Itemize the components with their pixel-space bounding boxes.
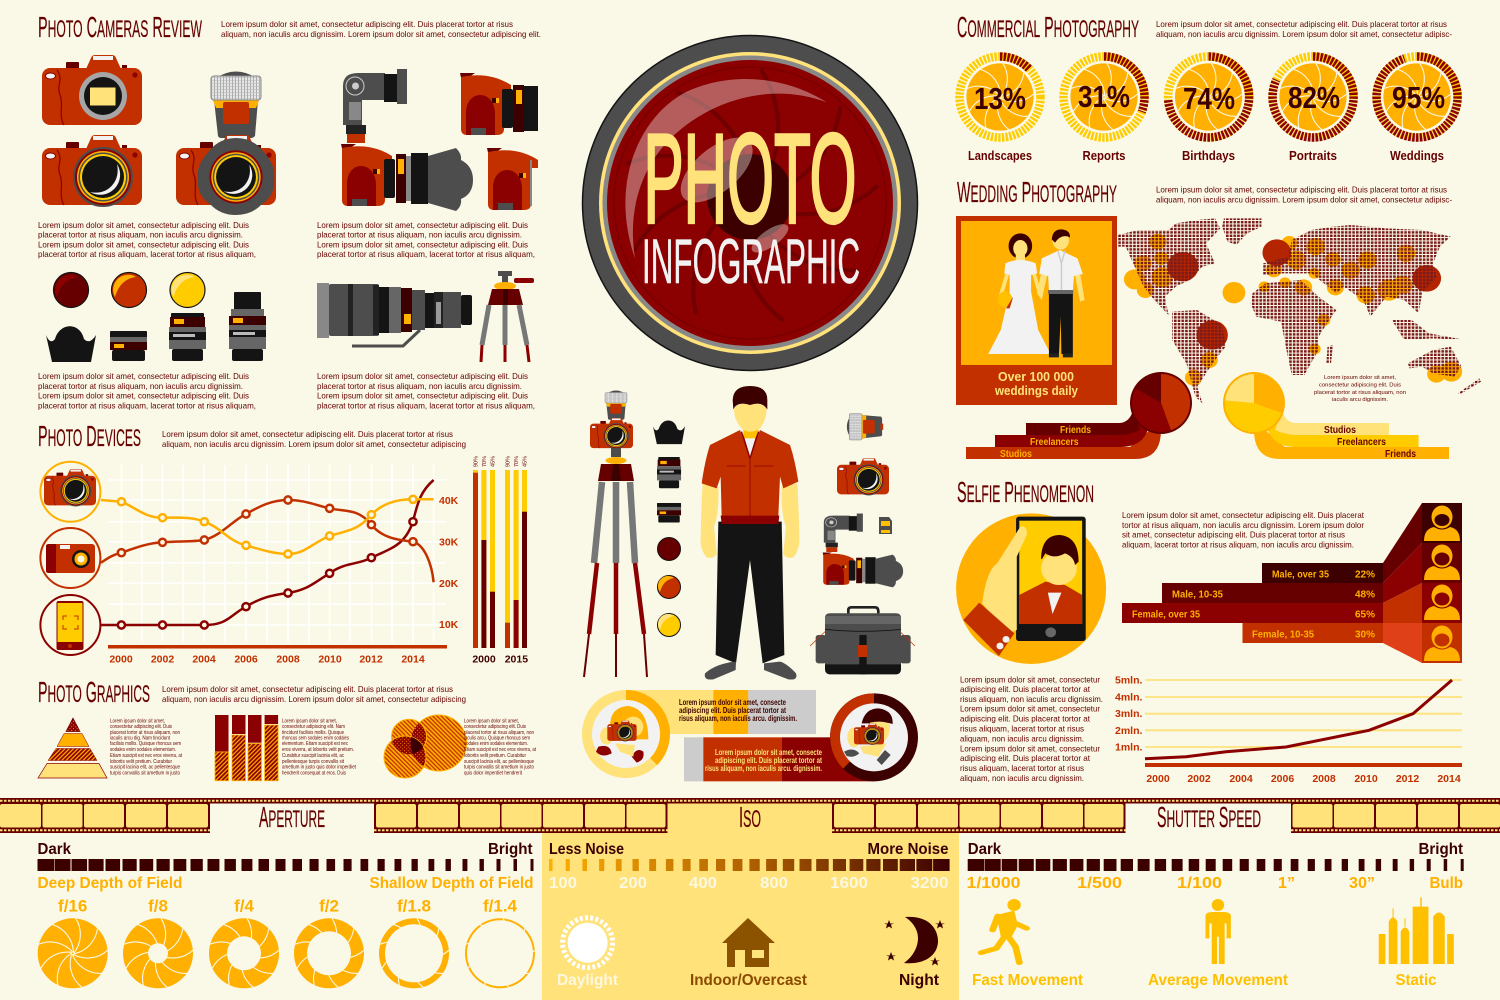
figure: bride and groom	[988, 229, 1085, 357]
text: camera bodies: placerat tortor at risus aliquam, lacerat tortor at risus aliquam,	[38, 249, 256, 259]
text: stacked bars	[282, 718, 356, 776]
text: telephoto and tripod: placerat tortor at risus aliquam, lacerat tortor at risus aliquam,	[317, 400, 535, 410]
panel: shutter scale: 1/500	[1077, 875, 1122, 892]
aperture stops	[38, 896, 536, 989]
callout: lorem yellow with photographer	[582, 690, 816, 778]
icon: static city	[1379, 897, 1454, 989]
text: stacked bars: eros viverra, at lobortis velit pretium.	[282, 747, 354, 753]
heading: shutter speed: SHUTTER SPEED	[1157, 802, 1261, 834]
text: map note	[1314, 375, 1406, 403]
intro text: graphics: Lorem ipsum dolor sit amet, consectetur adipiscing elit. Duis placerat tortor at risus	[162, 684, 453, 694]
world map	[1117, 218, 1481, 403]
line chart: selfies per year: 2014	[1437, 773, 1461, 785]
chart: selfie demographic funnel	[1122, 503, 1462, 663]
text: stacked bars: rhoncus sem sodales enim sodales	[282, 736, 349, 742]
gauge: portraits 82%: Portraits	[1289, 149, 1337, 163]
intro text: cameras: Lorem ipsum dolor sit amet, consectetur adipiscing elit. Duis placerat tortor at risus	[221, 19, 513, 29]
text: map note: consectetur adipiscing elit. Duis	[1319, 382, 1401, 388]
icon: fast movement runner: Fast Movement	[972, 972, 1084, 989]
intro text: devices: aliquam, non iaculis arcu dignissim. Lorem ipsum dolor sit amet, consectetur adipiscing	[162, 439, 466, 449]
gauge: portraits 82%	[1272, 56, 1354, 163]
text: pyramid: consectetur adipiscing elit. Duis	[110, 724, 172, 730]
text: selfie intro: aliquam, lacerat tortor at risus aliquam, non iaculis arcu dignissim.	[1122, 540, 1354, 550]
icon: camera bag	[810, 607, 915, 674]
text: venn diagram: lobortis velit pretium. Curabitur	[464, 753, 526, 759]
heading: commercial photography: COMMERCIAL PHOTOGRAPHY	[957, 12, 1139, 44]
text: pyramid: lobortis velit pretium. Curabitur	[110, 759, 172, 765]
text: camera bodies: Lorem ipsum dolor sit amet, consectetur adipiscing elit. Duis	[38, 220, 249, 230]
bar labels: 30%	[1355, 628, 1376, 640]
text: yellow callout: risus aliquam, non iaculis arcu. dignissim.	[679, 714, 797, 723]
x axis years: 2002	[151, 654, 174, 666]
line chart: photo devices	[101, 465, 459, 666]
text: filters and lenses	[38, 371, 256, 410]
icon: indoor house: Indoor/Overcast	[690, 972, 808, 989]
panel: shutter scale: Bulb	[1430, 875, 1463, 892]
icon: average movement person: Average Movement	[1148, 972, 1289, 989]
aperture stops: f/4	[234, 896, 254, 916]
text: side cameras: Lorem ipsum dolor sit amet, consectetur adipiscing elit. Duis	[317, 239, 528, 249]
icon: static city: Static	[1396, 972, 1437, 989]
icon: camera with lens	[42, 135, 142, 207]
chart: right pie with ribbons: Freelancers	[1337, 437, 1386, 448]
gauge: birthdays 74%: 74%	[1183, 81, 1235, 116]
text: filters and lenses: Lorem ipsum dolor sit amet, consectetur adipiscing elit. Duis	[38, 390, 249, 400]
text: venn diagram	[464, 718, 536, 776]
text: stacked bars: consectetur adipiscing elit. Nam	[282, 724, 345, 730]
text: red callout	[705, 748, 822, 773]
intro text: wedding	[1156, 184, 1452, 204]
text: map note: Lorem ipsum dolor sit amet,	[1324, 375, 1396, 381]
icon: side camera body	[487, 148, 538, 210]
icon: lens hood	[46, 326, 96, 362]
bar labels: Male, 10-35	[1172, 588, 1223, 600]
gauge: reports 31%: 31%	[1078, 79, 1130, 114]
y axis values: 20K	[439, 578, 459, 590]
icon: fast movement runner	[972, 899, 1084, 989]
chart: right pie with ribbons	[1223, 372, 1449, 460]
heading: photo cameras review: PHOTO CAMERAS REVIEW	[38, 12, 202, 44]
intro text: graphics	[162, 684, 466, 704]
text: telephoto and tripod	[317, 371, 535, 410]
text: telephoto and tripod: Lorem ipsum dolor sit amet, consectetur adipiscing elit. Duis	[317, 371, 528, 381]
title badge: lens: INFOGRAPHIC	[642, 227, 860, 297]
text: venn diagram: suscipit lacinia elit, ac pellentesque	[464, 759, 534, 765]
text: filters and lenses: placerat tortor at risus aliquam, lacerat tortor at risus aliquam,	[38, 400, 256, 410]
gauge: landscapes 13%	[960, 56, 1040, 163]
text: red callout: adipiscing elit. Duis placerat tortor at	[715, 756, 822, 765]
text: red callout: risus aliquam, non iaculis arcu. dignissim.	[705, 764, 822, 773]
text: red callout: Lorem ipsum dolor sit amet, consecte	[715, 748, 822, 757]
text: map note: iaculis arcu dignissim.	[1332, 397, 1388, 403]
icon: DSLR badge	[40, 462, 100, 522]
panel: aperture scale	[38, 841, 534, 892]
text: selfie body: Lorem ipsum dolor sit amet, consectetur	[960, 743, 1100, 753]
text: filters and lenses: Lorem ipsum dolor sit amet, consectetur adipiscing elit. Duis	[38, 371, 249, 381]
text: selfie body: risus aliquam, lacerat tortor at risus	[960, 763, 1084, 773]
text: selfie intro	[1122, 510, 1365, 550]
icon: indoor house	[690, 918, 808, 989]
icon: daylight sun: Daylight	[557, 972, 619, 989]
text: venn diagram: consectetur adipiscing elit. Duis	[464, 724, 526, 730]
intro text: graphics: aliquam, non iaculis arcu dignissim. Lorem ipsum dolor sit amet, consectetur adipiscing	[162, 694, 466, 704]
text: venn diagram: Lorem ipsum dolor sit amet,	[464, 718, 519, 724]
text: camera bodies	[38, 220, 256, 259]
panel: shutter scale: Bright	[1418, 841, 1464, 858]
text: venn diagram: sodales enim sodales elementum.	[464, 741, 528, 747]
line chart: selfies per year: 1mln.	[1115, 742, 1143, 754]
x axis years: 2012	[359, 654, 383, 666]
text: selfie intro: Lorem ipsum dolor sit amet, consectetur adipiscing elit. Duis placerat	[1122, 510, 1365, 520]
text: pyramid: sodales enim sodales elementum.	[110, 747, 176, 753]
panel: aperture scale: Bright	[488, 841, 533, 858]
panel: iso scale: 400	[689, 875, 717, 892]
text: camera bodies: Lorem ipsum dolor sit amet, consectetur adipiscing elit. Duis	[38, 239, 249, 249]
text: selfie body: aliquam, non iaculis arcu dignissim.	[960, 733, 1084, 743]
bar labels: 22%	[1355, 568, 1376, 580]
chart: pyramid	[38, 718, 107, 778]
y axis values	[439, 495, 459, 631]
y axis values: 40K	[439, 495, 459, 507]
text: pyramid	[110, 718, 182, 776]
line chart: selfies per year: 2010	[1354, 773, 1378, 785]
icon: side camera with flash and telephoto hood	[341, 69, 473, 211]
text: selfie body: risus aliquam, lacerat tortor at risus	[960, 724, 1084, 734]
bar chart: 2000 vs 2015: 70%	[482, 456, 488, 467]
series: smartphones	[101, 480, 434, 629]
icon: daylight sun	[557, 918, 619, 989]
line chart: selfies per year: 2000	[1146, 773, 1170, 785]
gauge: reports 31%	[1064, 56, 1145, 163]
text: pyramid: iaculis arcu dig. Nam tincidunt	[110, 736, 170, 742]
panel: iso scale: More Noise	[868, 841, 949, 858]
text: telephoto and tripod: placerat tortor at risus aliquam, non iaculis arcu dignissim.	[317, 381, 522, 391]
bar chart: 2000 vs 2015: 90%	[506, 456, 512, 467]
text: venn diagram: placerat tortor at risus aliquam, non	[464, 730, 534, 736]
line chart: selfies per year: 2002	[1187, 773, 1211, 785]
aperture stops: f/1.4	[483, 896, 518, 916]
gauge: weddings 95%	[1376, 56, 1458, 163]
series: DSLR cameras	[101, 496, 434, 558]
icon: camera body with sensor	[42, 55, 142, 125]
icon: small camera	[837, 458, 889, 495]
text: selfie body: adipiscing elit. Duis placerat tortor at	[960, 753, 1091, 763]
title badge: lens	[582, 36, 918, 370]
chart: left pie with ribbons: Freelancers	[1030, 437, 1079, 448]
busts	[1424, 506, 1460, 661]
text: venn diagram: iaculis arcu. Quisque rhoncus sem	[464, 736, 530, 742]
icon: memory card	[879, 517, 892, 534]
text: pyramid: placerat tortor at risus aliquam, non	[110, 730, 180, 736]
text: camera bodies: placerat tortor at risus aliquam, non iaculis arcu dignissim.	[38, 230, 243, 240]
text: venn diagram: quis dolor imperdiet hendrerit	[464, 770, 522, 776]
bar chart: 2000 vs 2015: 2015	[505, 654, 528, 666]
icons: lenses	[110, 292, 266, 361]
series: compact cameras	[101, 496, 434, 582]
bar labels: 48%	[1355, 588, 1376, 600]
icon: camera on tall tripod	[584, 391, 647, 677]
text: selfie body: Lorem ipsum dolor sit amet, consectetur	[960, 674, 1100, 684]
chart: left pie with ribbons: Friends	[1060, 425, 1091, 436]
heading: photo graphics: PHOTO GRAPHICS	[38, 677, 150, 709]
aperture stops: f/8	[148, 896, 168, 916]
panel: iso scale: Less Noise	[549, 841, 624, 858]
panel: iso scale: 3200	[910, 875, 949, 892]
panel: aperture scale: Shallow Depth of Field	[370, 875, 534, 892]
chart: left pie with ribbons: Studios	[1000, 449, 1032, 460]
gauge: weddings 95%: 95%	[1392, 80, 1445, 115]
x axis years: 2014	[401, 654, 425, 666]
y axis values: 30K	[439, 537, 459, 549]
text: stacked bars: hendrerit consequat at eros. Duis	[282, 770, 346, 776]
icons: hood, lenses, filters column	[653, 421, 685, 636]
bar chart: 2000 vs 2015	[472, 456, 528, 666]
y axis values: 10K	[439, 619, 459, 631]
panel: shutter scale: 1/100	[1177, 875, 1222, 892]
text: venn diagram: turpis convallis sit ametlum in justo	[464, 764, 534, 770]
text: stacked bars: tincidunt facilisis mollis. Quisque	[282, 730, 344, 736]
line chart: selfies per year: 2012	[1396, 773, 1419, 785]
gauge: birthdays 74%: Birthdays	[1182, 149, 1235, 163]
panel: iso scale: 800	[760, 875, 788, 892]
chart: right pie with ribbons: Friends	[1385, 449, 1416, 460]
x axis years	[109, 654, 425, 666]
heading: wedding photography: WEDDING PHOTOGRAPHY	[957, 177, 1117, 209]
panel: shutter scale	[966, 841, 1464, 892]
text: stacked bars: Lorem ipsum dolor sit amet,	[282, 718, 337, 724]
chart: right pie with ribbons: Studios	[1324, 425, 1356, 436]
text: pyramid: turpis convallis sit ametlum in justo	[110, 770, 180, 776]
text: selfie body: Lorem ipsum dolor sit amet, consectetur	[960, 704, 1100, 714]
icon: small tripod	[481, 271, 534, 362]
panel: wedding couple poster	[956, 216, 1117, 405]
intro text: devices: Lorem ipsum dolor sit amet, consectetur adipiscing elit. Duis placerat tortor at risus	[162, 429, 453, 439]
panel: iso scale: 1600	[830, 875, 868, 892]
panel: iso background	[542, 803, 959, 1000]
text: stacked bars: pellentesque turpis convallis sit	[282, 759, 344, 765]
gauge: weddings 95%: Weddings	[1390, 149, 1444, 163]
intro text: commercial: Lorem ipsum dolor sit amet, consectetur adipiscing elit. Duis placerat tortor at risus	[1156, 19, 1447, 29]
bar chart: 2000 vs 2015: 70%	[514, 456, 520, 467]
intro text: cameras: aliquam, non iaculis arcu dignissim. Lorem ipsum dolor sit amet, consectetur adipiscing elit.	[221, 29, 541, 39]
icon: night moon: Night	[899, 972, 940, 989]
icon: flash unit	[847, 414, 883, 440]
text: selfie body: risus aliquam, non iaculis arcu dignissim.	[960, 694, 1103, 704]
bar chart: 2000 vs 2015: 45%	[522, 456, 528, 467]
bar chart: 2000 vs 2015: 90%	[474, 456, 480, 467]
figure: photographer	[701, 386, 799, 680]
panel: shutter scale: 1”	[1278, 875, 1295, 892]
poster caption: weddings daily	[994, 383, 1079, 398]
icon: average movement person	[1148, 899, 1289, 989]
text: pyramid: facilisis mollis. Quisque rhoncus sem	[110, 741, 181, 747]
text: map note: placerat tortor at risus aliquam, non	[1314, 390, 1406, 396]
bar chart: 2000 vs 2015: 2000	[472, 654, 496, 666]
chart: venn diagram	[384, 715, 467, 778]
gauge: landscapes 13%: Landscapes	[968, 149, 1032, 163]
text: yellow callout	[679, 698, 797, 723]
icon: telephoto lens	[317, 283, 472, 346]
panel: iso scale: 200	[619, 875, 647, 892]
bar labels	[1132, 568, 1376, 640]
line chart: selfies per year	[1115, 674, 1462, 785]
x axis years: 2004	[192, 654, 216, 666]
text: selfie body: adipiscing elit. Duis placerat tortor at	[960, 684, 1091, 694]
title badge: lens: PHOTO	[644, 108, 856, 250]
icon: camera with flash and hood	[176, 72, 276, 215]
text: pyramid: Etiam suscipit est nec eros viverra, at	[110, 753, 182, 759]
text: stacked bars: Curabitur suscipit lacinia elit, ac	[282, 753, 344, 759]
panel: aperture scale: Deep Depth of Field	[38, 875, 182, 892]
x axis years: 2010	[318, 654, 342, 666]
chart: left pie with ribbons	[966, 372, 1192, 460]
intro text: devices	[162, 429, 466, 449]
text: selfie body	[960, 674, 1103, 783]
icon: compact camera badge	[40, 528, 100, 588]
gauge: portraits 82%: 82%	[1288, 80, 1340, 115]
bar labels: Female, over 35	[1132, 608, 1200, 620]
text: side cameras	[317, 220, 535, 259]
intro text: commercial	[1156, 19, 1452, 39]
text: yellow callout: Lorem ipsum dolor sit amet, consecte	[679, 698, 786, 707]
x axis years: 2006	[234, 654, 258, 666]
text: selfie intro: sit amet, consectetur adipiscing elit. Duis placerat tortor at risus	[1122, 530, 1345, 540]
text: side cameras: placerat tortor at risus aliquam, lacerat tortor at risus aliquam,	[317, 249, 535, 259]
icon: flash camera combo	[823, 514, 903, 587]
icons: lens filters	[54, 272, 205, 308]
gauge: landscapes 13%: 13%	[974, 81, 1026, 116]
heading: aperture: APERTURE	[259, 802, 325, 834]
intro text: cameras	[221, 19, 541, 39]
panel: shutter scale: Dark	[968, 841, 1001, 858]
icon: hand holding phone	[956, 513, 1106, 664]
gauge: birthdays 74%	[1168, 56, 1249, 163]
line chart: selfies per year: 2006	[1271, 773, 1294, 785]
panel: iso scale: 100	[549, 875, 577, 892]
line chart: selfies per year: 2mln.	[1115, 725, 1143, 737]
line chart: selfies per year: 4mln.	[1115, 692, 1143, 704]
chart: stacked bars	[215, 715, 278, 781]
bar labels: Female, 10-35	[1252, 628, 1314, 640]
x axis years: 2000	[109, 654, 133, 666]
bar chart: 2000 vs 2015: 45%	[490, 456, 496, 467]
heading: selfie phenomenon: SELFIE PHENOMENON	[957, 477, 1094, 509]
text: selfie body: aliquam, non iaculis arcu dignissim.	[960, 773, 1084, 783]
line chart: selfies per year: 2004	[1229, 773, 1253, 785]
text: side cameras: placerat tortor at risus aliquam, non iaculis arcu dignissim.	[317, 230, 522, 240]
icon: side camera with short lens	[460, 73, 538, 135]
text: venn diagram: Etiam suscipit est nec eros viverra, at	[464, 747, 536, 753]
line chart: selfies per year: 3mln.	[1115, 708, 1143, 720]
intro text: wedding: aliquam, non iaculis arcu dignissim. Lorem ipsum dolor sit amet, consectetur adipisc-	[1156, 194, 1452, 204]
panel: shutter scale: 1/1000	[966, 875, 1021, 892]
poster caption: Over 100 000	[998, 369, 1074, 384]
line chart: selfies per year: 5mln.	[1115, 674, 1143, 686]
text: pyramid: Lorem ipsum dolor sit amet,	[110, 718, 165, 724]
intro text: wedding: Lorem ipsum dolor sit amet, consectetur adipiscing elit. Duis placerat tortor at risus	[1156, 184, 1447, 194]
heading: iso: ISO	[739, 802, 761, 834]
bar labels: 65%	[1355, 608, 1376, 620]
film strip	[0, 798, 1500, 833]
panel: iso scale	[549, 841, 950, 892]
line chart: selfies per year: 2008	[1312, 773, 1336, 785]
intro text: commercial: aliquam, non iaculis arcu dignissim. Lorem ipsum dolor sit amet, consectetur adipisc-	[1156, 29, 1452, 39]
text: pyramid: suscipit lacinia elit, ac pellentesque	[110, 764, 180, 770]
icon: smartphone badge	[40, 595, 100, 655]
poster caption	[994, 369, 1079, 398]
aperture stops: f/16	[58, 896, 87, 916]
bar labels: Male, over 35	[1272, 568, 1329, 580]
text: selfie intro: tortor at risus aliquam, non iaculis arcu dignissim. Lorem ipsum dolor	[1122, 520, 1364, 530]
text: selfie body: adipiscing elit. Duis placerat tortor at	[960, 714, 1091, 724]
panel: shutter scale: 30”	[1349, 875, 1375, 892]
text: yellow callout: adipiscing elit. Duis placerat tortor at	[679, 706, 786, 715]
aperture stops: f/1.8	[397, 896, 431, 916]
x axis years: 2008	[276, 654, 300, 666]
panel: aperture scale: Dark	[38, 841, 71, 858]
text: telephoto and tripod: Lorem ipsum dolor sit amet, consectetur adipiscing elit. Duis	[317, 390, 528, 400]
text: stacked bars: elementum. Etiam suscipit est nec	[282, 741, 348, 747]
text: stacked bars: ametlum in justo quis dolor imperdiet	[282, 764, 356, 770]
gauge: reports 31%: Reports	[1082, 149, 1126, 163]
callout: lorem red with photographer	[684, 693, 918, 781]
text: side cameras: Lorem ipsum dolor sit amet, consectetur adipiscing elit. Duis	[317, 220, 528, 230]
icon: night moon	[884, 917, 945, 989]
heading: photo devices: PHOTO DEVICES	[38, 421, 141, 453]
aperture stops: f/2	[319, 896, 339, 916]
text: filters and lenses: placerat tortor at risus aliquam, non iaculis arcu dignissim.	[38, 381, 243, 391]
